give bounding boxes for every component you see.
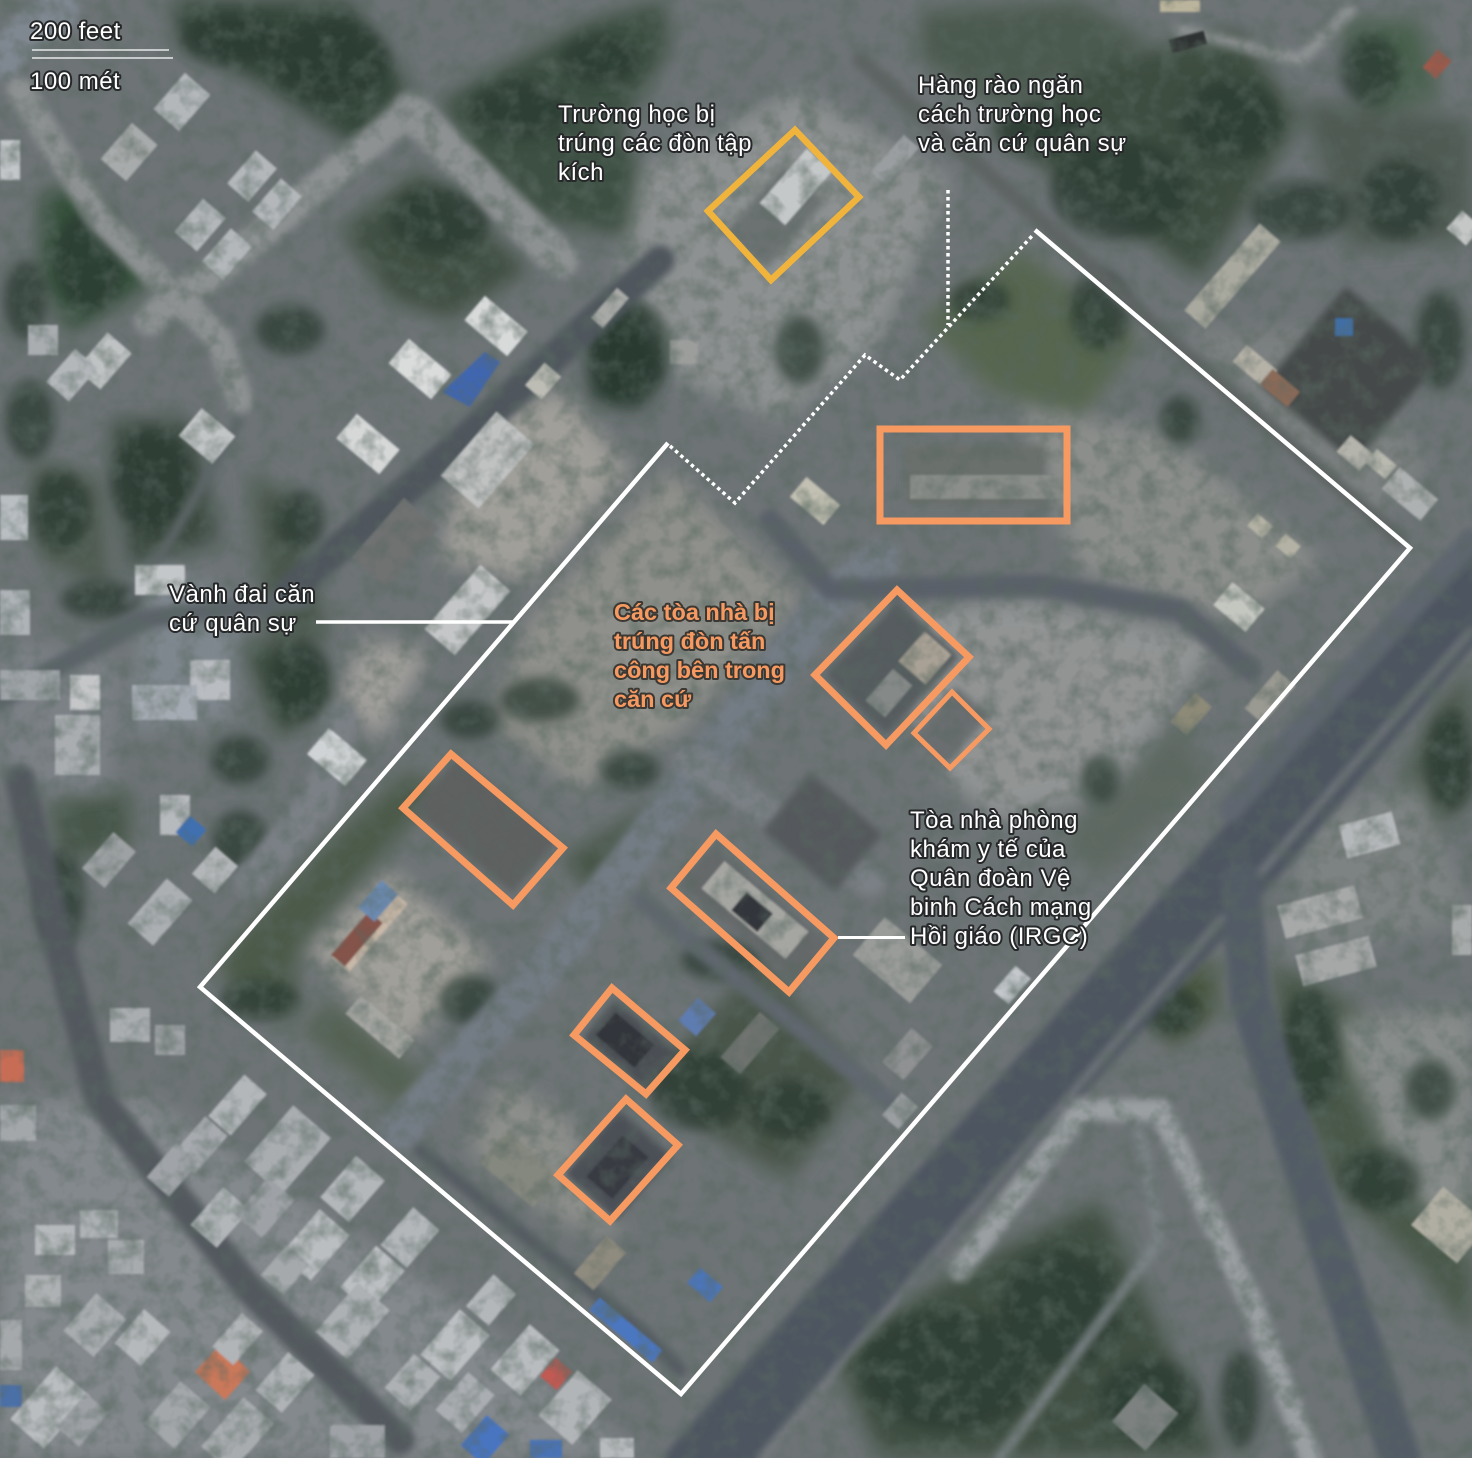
label: strikes inside base: trúng đòn tấn: [614, 628, 765, 654]
label: fence: cách trường học: [918, 101, 1101, 128]
buildings inside the base: [331, 135, 1301, 1362]
strike box north: [880, 429, 1067, 521]
scale line metres: [32, 57, 173, 59]
label: IRGC clinic: Quân đoàn Vệ: [910, 865, 1071, 892]
scale label feet: 200 feet: [30, 18, 121, 45]
strike box west: [403, 754, 563, 905]
strike box south lower: [558, 1099, 678, 1221]
label: perimeter: Vành đai căn: [169, 581, 315, 608]
dark site patches: [413, 165, 1438, 1220]
dotted fence between school and base: [670, 190, 1032, 503]
buildings south-west cluster: [0, 1074, 634, 1458]
strike box south upper: [574, 988, 685, 1094]
label: strikes inside base: công bên trong: [614, 657, 785, 683]
label: fence: và căn cứ quân sự: [918, 130, 1127, 157]
school strike marker: [708, 130, 859, 280]
label: IRGC clinic: Hồi giáo (IRGC): [910, 923, 1088, 950]
label: IRGC clinic: binh Cách mạng: [910, 894, 1092, 921]
scale label metres: 100 mét: [30, 68, 120, 95]
strike markers inside the base: [403, 429, 1067, 1221]
label: school: trúng các đòn tập: [558, 130, 752, 157]
label: perimeter: cứ quân sự: [169, 610, 297, 637]
buildings east: [1112, 0, 1472, 1451]
scale bar: [30, 18, 173, 95]
label: fence: Hàng rào ngăn: [918, 72, 1083, 99]
label: school: kích: [558, 159, 604, 186]
scale line feet: [32, 49, 169, 51]
strike box centre large: [815, 590, 969, 745]
label: strikes inside base: Các tòa nhà bị: [614, 599, 775, 625]
buildings west: [0, 495, 367, 1141]
label: school: Trường học bị: [558, 101, 715, 128]
perimeter leader line: [316, 620, 513, 624]
strike box clinic: [671, 834, 834, 992]
label: strikes inside base: căn cứ: [614, 686, 692, 712]
buildings north-west: [0, 73, 561, 655]
strike box centre small: [914, 692, 989, 768]
label: IRGC clinic: Tòa nhà phòng: [910, 807, 1078, 834]
clinic leader line: [838, 936, 905, 939]
military base perimeter: [200, 230, 1410, 1394]
label: IRGC clinic: khám y tế của: [910, 836, 1066, 863]
